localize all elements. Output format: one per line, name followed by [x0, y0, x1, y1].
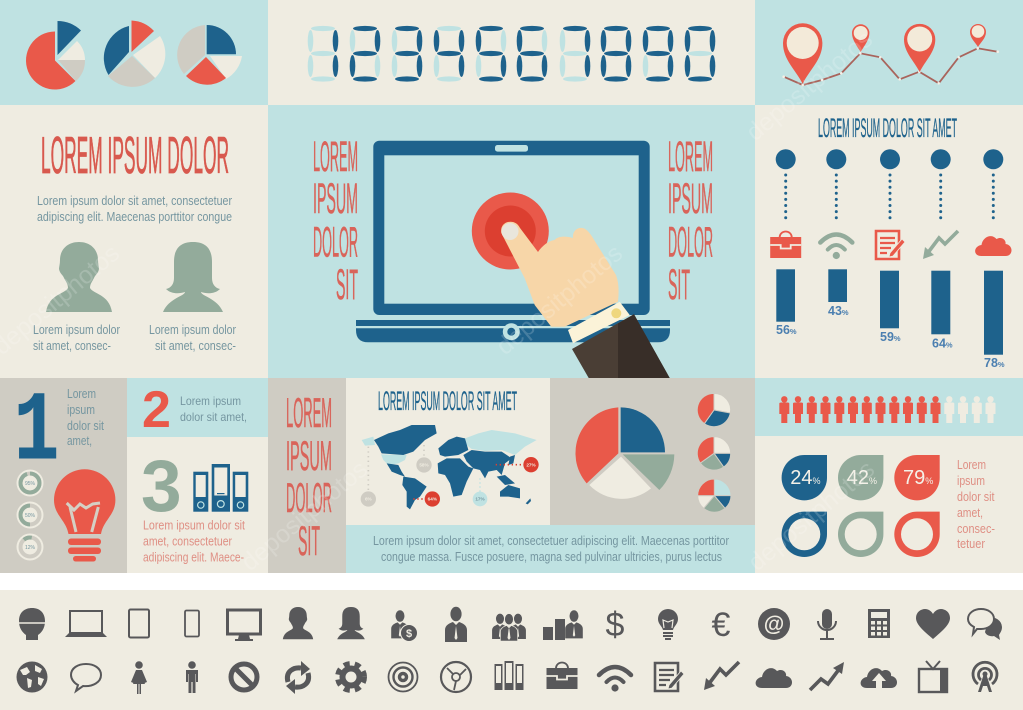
large pie chart	[575, 407, 674, 499]
stacked title: right of laptop	[668, 133, 713, 309]
text block: drops note: dolor sit	[957, 490, 995, 504]
drop 24%: 24%	[790, 467, 821, 489]
icon: euro: €	[712, 606, 731, 644]
ring drop red	[894, 512, 940, 557]
icon: globe	[16, 662, 48, 692]
watermark text	[0, 25, 880, 577]
text block: drops note	[957, 458, 995, 551]
icon: businessman	[445, 607, 467, 642]
text block: drops note: tetuer	[957, 537, 985, 551]
icon: target	[388, 662, 418, 692]
panel: world map background	[346, 378, 550, 525]
gauges	[16, 470, 44, 560]
icon: woman	[131, 661, 147, 694]
text: LOREM IPSUM DOLOR	[41, 127, 229, 185]
icon: female bust	[163, 242, 223, 312]
icon: business team	[492, 614, 526, 641]
icon: document	[655, 663, 684, 691]
icon: dial	[441, 662, 471, 692]
map callouts: 58%	[419, 463, 430, 468]
light regions	[362, 430, 537, 465]
text block: step 1	[67, 387, 104, 448]
hand pressing button	[501, 222, 670, 378]
icon: at sign	[758, 608, 790, 640]
icon: male bust	[46, 242, 112, 312]
bar column 56%	[770, 149, 801, 337]
pie chart 1	[26, 21, 85, 90]
drop 24%	[782, 455, 827, 500]
text block: female caption: sit amet, consec-	[155, 339, 236, 353]
text block: caption strip: congue massa. Fusce posuere, magna sed pulvinar ultricies, purus lectus	[381, 550, 722, 564]
bar chart with icons	[770, 149, 1012, 370]
ring drop blue	[782, 512, 827, 557]
text block: step 3	[143, 518, 245, 564]
text block: female caption: Lorem ipsum dolor	[149, 323, 236, 337]
panel: background top centre	[268, 0, 755, 105]
text block: step 2: dolor sit amet,	[180, 410, 247, 424]
laptop illustration	[356, 141, 670, 342]
icon: heart	[916, 609, 950, 639]
icon: speech bubble	[71, 664, 101, 691]
stacked title: left of laptop	[313, 133, 358, 309]
watermark text: depositphotos	[236, 455, 373, 577]
text block: drops note: amet,	[957, 506, 983, 520]
red people	[779, 396, 940, 423]
text: LOREM IPSUM DOLOR SIT AMET	[378, 386, 517, 416]
text block: caption strip: Lorem ipsum dolor sit amet, consectetuer adipiscing elit. Maecenas porttitor	[373, 534, 729, 548]
pie chart 2	[104, 20, 165, 87]
pin 4	[970, 24, 986, 47]
map callouts: 17%	[475, 497, 486, 502]
text block: intro paragraph	[37, 194, 232, 224]
pin 3	[904, 24, 935, 72]
icon: rising arrow	[810, 662, 844, 690]
panel: background middle right	[755, 105, 1023, 378]
bar column 59%: 59%	[880, 330, 901, 344]
route line	[784, 48, 998, 85]
text: LOREM	[313, 133, 358, 181]
watermark text: depositphotos	[491, 239, 628, 361]
small pie 2	[697, 437, 731, 470]
panel: background top right	[755, 0, 1023, 105]
panel: stacked title background	[268, 378, 346, 573]
icon: businessman with dollar coin: $	[406, 628, 412, 640]
icon: gear	[338, 664, 364, 690]
text block: step 3: amet, consectetuer	[143, 534, 232, 548]
icon: female user	[337, 607, 365, 639]
text: SIT	[336, 261, 358, 309]
panel: background middle left	[0, 105, 268, 378]
icon: prohibited	[231, 664, 257, 690]
cream people	[944, 396, 996, 423]
ring drop sage	[838, 512, 883, 557]
stacked title: right of laptop: SIT	[668, 261, 690, 309]
gauge 50%: 50%	[25, 513, 36, 519]
panel: step 3 background	[127, 437, 268, 573]
text: LOREM	[668, 133, 713, 181]
text block: step 3: Lorem ipsum dolor sit	[143, 518, 245, 532]
icon: broadcast antenna	[973, 662, 997, 692]
people pictogram row	[779, 396, 996, 423]
drop 79%	[894, 455, 940, 500]
icon: head with smart glasses	[18, 608, 45, 640]
red touch button	[472, 192, 549, 270]
text block: male caption	[33, 323, 120, 353]
text block: male caption: sit amet, consec-	[33, 339, 111, 353]
text block: intro paragraph: adipiscing elit. Maecenas porttitor congue	[37, 210, 232, 224]
map callouts	[361, 445, 539, 507]
text block: step 3: adipiscing elit. Maece-	[143, 550, 244, 564]
panel: icon strip background	[0, 590, 1023, 710]
stacked title: bottom: SIT	[298, 517, 320, 564]
map pins on route line	[782, 23, 999, 86]
text block: drops note: Lorem	[957, 458, 986, 472]
icon: speech bubbles	[968, 609, 1002, 640]
text block: caption strip	[373, 534, 729, 564]
icon: briefcase	[546, 662, 578, 689]
gauge 95%: 95%	[25, 481, 36, 487]
panel: step 2 background	[127, 378, 268, 437]
panel: drops background	[755, 436, 1023, 573]
panel: caption strip background	[346, 525, 755, 573]
text: IPSUM	[313, 175, 358, 223]
text: DOLOR	[286, 474, 332, 521]
drop 42%: 42%	[847, 467, 877, 489]
text block: step 2: Lorem ipsum	[180, 394, 241, 408]
icon: cloud	[756, 668, 792, 688]
text: IPSUM	[286, 432, 332, 479]
bar column 43%	[820, 149, 852, 318]
icon: man	[186, 661, 198, 693]
icon: businessman with dollar coin	[391, 610, 418, 642]
small pie 3	[698, 479, 731, 512]
icon: phone	[185, 610, 199, 636]
panel: people row background	[755, 378, 1023, 436]
panel: step 1 background	[0, 378, 127, 573]
bar column 78%: 78%	[984, 356, 1005, 370]
icon: cloud upload	[861, 668, 897, 688]
icon: monitor	[228, 610, 260, 641]
text block: step 1: amet,	[67, 434, 92, 448]
text block: intro paragraph: Lorem ipsum dolor sit amet, consectetuer	[37, 194, 232, 208]
blue regions	[374, 425, 531, 509]
bar column 59%	[876, 149, 905, 344]
text: DOLOR	[668, 218, 713, 266]
pin 1	[783, 23, 822, 84]
pie chart 3	[177, 25, 242, 85]
number 1: 1	[14, 378, 59, 488]
text block: drops note: ipsum	[957, 474, 985, 488]
small pie 1	[697, 393, 731, 427]
bar column 78%	[975, 149, 1012, 370]
map callouts: 6%	[365, 497, 373, 502]
binder middle	[212, 464, 230, 512]
icon: light bulb	[54, 469, 115, 562]
bar column 43%: 43%	[828, 304, 849, 318]
panel: pie charts background	[550, 378, 755, 525]
text: LOREM	[286, 389, 332, 436]
icon: tablet	[129, 610, 149, 638]
binder right	[233, 472, 248, 512]
stacked title: bottom	[286, 389, 332, 564]
percentage drops	[782, 455, 940, 557]
text block: female caption	[149, 323, 236, 353]
drop 42%	[838, 455, 883, 500]
text block: step 1: dolor sit	[67, 419, 104, 433]
world map	[361, 425, 539, 509]
binder left	[193, 472, 208, 512]
map callouts: 27%	[526, 462, 537, 467]
icon: binders	[193, 464, 248, 512]
icon strip	[16, 606, 1002, 694]
icon: dollar: $	[606, 606, 625, 644]
number 2: 2	[142, 381, 171, 439]
text block: step 1: Lorem	[67, 387, 96, 401]
icon: falling arrow	[704, 662, 739, 690]
icon: television	[919, 661, 947, 692]
text: DOLOR	[313, 218, 358, 266]
icon: growth bars with man	[543, 610, 583, 640]
icon: laptop	[65, 611, 107, 637]
icon: refresh	[286, 661, 310, 694]
text block: step 1: ipsum	[67, 403, 95, 417]
map callouts: 64%	[428, 497, 438, 502]
text: IPSUM	[668, 175, 713, 223]
icon: calculator	[868, 609, 890, 638]
gauge 12%: 12%	[25, 545, 36, 551]
bar column 64%	[923, 149, 958, 351]
pin 2	[852, 24, 869, 52]
bar column 56%: 56%	[776, 323, 797, 337]
icon: at sign: @	[764, 613, 784, 636]
panel: background middle centre	[268, 105, 755, 378]
panel: background top left	[0, 0, 268, 105]
text block: drops note: consec-	[957, 522, 995, 536]
watermark text: depositphotos	[741, 25, 878, 147]
text block: step 2	[180, 394, 247, 424]
drop 79%: 79%	[903, 467, 933, 489]
watermark text: depositphotos	[743, 455, 880, 577]
text block: male caption: Lorem ipsum dolor	[33, 323, 120, 337]
pie charts: top left trio	[26, 20, 242, 90]
small pie charts	[697, 393, 731, 512]
icon: microphone	[818, 609, 836, 639]
bar column 64%: 64%	[932, 337, 953, 351]
icon: binders small	[494, 661, 524, 690]
icon: wifi	[599, 667, 631, 692]
number 3: 3	[141, 446, 182, 527]
icon: male user	[283, 607, 313, 639]
digital number display	[308, 26, 715, 82]
icon: small bulb	[658, 609, 678, 640]
